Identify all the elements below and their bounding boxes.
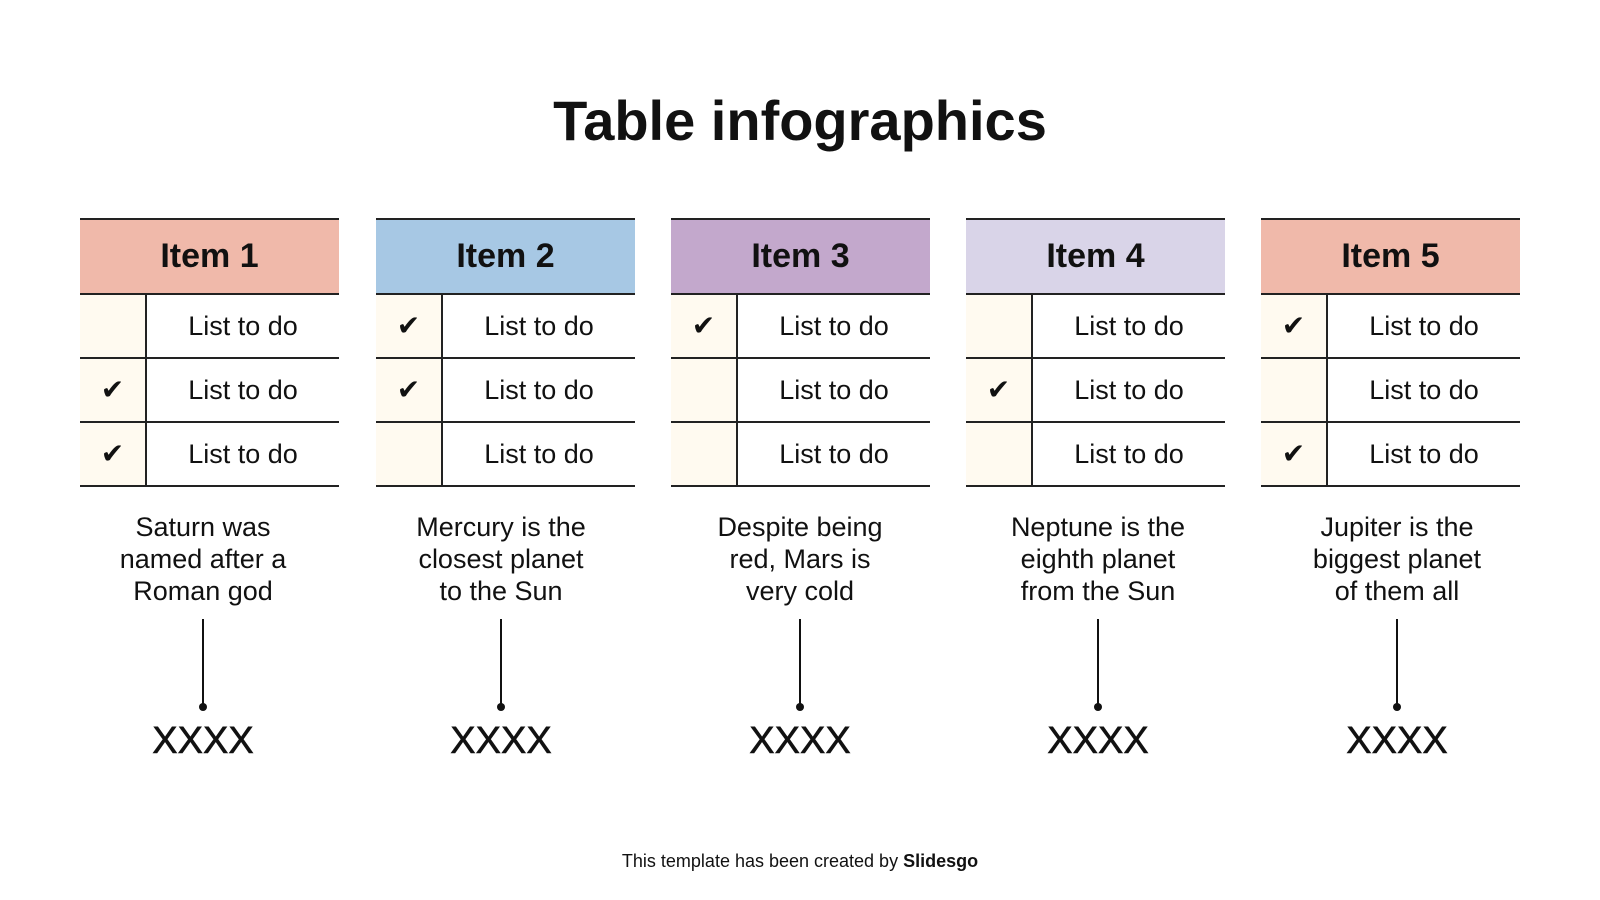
panel: item 2 table [376, 218, 635, 487]
panel: item 3 table: List to do [779, 439, 889, 469]
panel: item 3 table: ✔ [692, 310, 715, 341]
panel: item 4 table: List to do [1074, 375, 1184, 405]
text: description 3: red, Mars is [729, 544, 871, 574]
panel: item 2 table: List to do [484, 439, 594, 469]
header: item 3 [671, 218, 930, 295]
panel: item 1 table: ✔ [101, 374, 124, 405]
connector dot 3 [796, 703, 804, 711]
title: Table infographics [553, 89, 1047, 152]
value 2: XXXX [450, 720, 552, 762]
connector dot 5 [1393, 703, 1401, 711]
header: item 1 [80, 218, 339, 295]
header: item 4 [966, 218, 1225, 295]
connector dot 1 [199, 703, 207, 711]
panel: item 5 table [1261, 218, 1520, 487]
header: item 1: Item 1 [160, 237, 259, 275]
header: item 2 [376, 218, 635, 295]
panel: item 4 table [966, 218, 1225, 487]
connector 2 [500, 619, 502, 708]
text: description 5: of them all [1335, 576, 1459, 606]
panel: item 3 table [671, 218, 930, 487]
panel: item 5 table: ✔ [1282, 310, 1305, 341]
panel: item 4 table: ✔ [987, 374, 1010, 405]
text: description 1: Roman god [133, 576, 273, 606]
panel: item 5 table: ✔ [1282, 438, 1305, 469]
panel: item 3 table: List to do [779, 311, 889, 341]
text: description 1: Saturn was [135, 512, 271, 542]
value 5: XXXX [1346, 720, 1448, 762]
header: item 3: Item 3 [751, 237, 850, 275]
panel: item 1 table [80, 218, 339, 487]
header: item 5: Item 5 [1341, 237, 1440, 275]
connector 1 [202, 619, 204, 708]
panel: item 4 table: List to do [1074, 439, 1184, 469]
text: description 1 [120, 512, 286, 606]
value 3: XXXX [749, 720, 851, 762]
text: description 5 [1313, 512, 1481, 606]
panel: item 4 table: List to do [1074, 311, 1184, 341]
text: description 4: from the Sun [1021, 576, 1175, 606]
panel: item 1 table: ✔ [101, 438, 124, 469]
panel: item 1 table: List to do [188, 439, 298, 469]
connector 3 [799, 619, 801, 708]
header: item 2: Item 2 [456, 237, 555, 275]
panel: item 2 table: List to do [484, 311, 594, 341]
text: description 2: to the Sun [439, 576, 563, 606]
panel: item 1 table: List to do [188, 311, 298, 341]
panel: item 5 table: List to do [1369, 375, 1479, 405]
text: description 5: biggest planet [1313, 544, 1481, 574]
text: description 2: closest planet [418, 544, 584, 574]
text: description 4: eighth planet [1021, 544, 1175, 574]
header: item 4: Item 4 [1046, 237, 1145, 275]
panel: item 2 table: List to do [484, 375, 594, 405]
text: description 1: named after a [120, 544, 286, 574]
value 4: XXXX [1047, 720, 1149, 762]
text: description 4 [1011, 512, 1185, 606]
panel: item 3 table: List to do [779, 375, 889, 405]
header: item 5 [1261, 218, 1520, 295]
text: description 3: Despite being [717, 512, 883, 542]
text: description 3: very cold [746, 576, 854, 606]
text: description 2 [416, 512, 586, 606]
text: description 5: Jupiter is the [1320, 512, 1474, 542]
panel: item 2 table: ✔ [397, 374, 420, 405]
connector 4 [1097, 619, 1099, 708]
footer: This template has been created by Slidesgo [622, 851, 978, 871]
panel: item 2 table: ✔ [397, 310, 420, 341]
connector 5 [1396, 619, 1398, 708]
text: description 3 [717, 512, 883, 606]
value 1: XXXX [152, 720, 254, 762]
panel: item 1 table: List to do [188, 375, 298, 405]
text: description 4: Neptune is the [1011, 512, 1185, 542]
panel: item 5 table: List to do [1369, 311, 1479, 341]
text: description 2: Mercury is the [416, 512, 586, 542]
connector dot 4 [1094, 703, 1102, 711]
connector dot 2 [497, 703, 505, 711]
panel: item 5 table: List to do [1369, 439, 1479, 469]
